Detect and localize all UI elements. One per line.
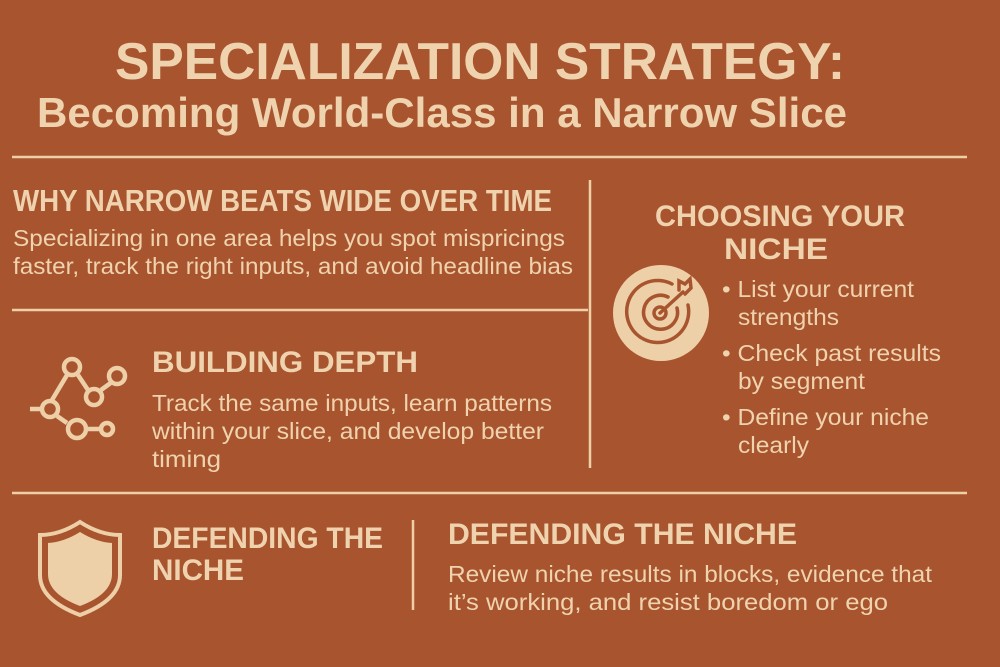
panel: why narrow beats wide: WHY NARROW BEATS WIDE OVER TIME bbox=[13, 183, 552, 218]
panel: defending the niche (left): DEFENDING THE bbox=[152, 522, 383, 555]
bullet list bbox=[722, 276, 941, 458]
bullet list: • Check past results bbox=[722, 340, 941, 366]
icon: target bbox=[613, 265, 709, 361]
panel: why narrow beats wide: Specializing in one area helps you spot mispricings bbox=[13, 225, 565, 251]
icon: network graph bbox=[30, 359, 125, 438]
panel: why narrow beats wide: faster, track the right inputs, and avoid headline bias bbox=[13, 253, 573, 279]
bullet list: strengths bbox=[738, 304, 839, 330]
panel: defending the niche (left) bbox=[40, 522, 383, 615]
title: Becoming World-Class in a Narrow Slice bbox=[37, 89, 847, 136]
bullet list: clearly bbox=[738, 432, 810, 458]
bullet list: • Define your niche bbox=[722, 404, 929, 430]
panel: choosing your niche: NICHE bbox=[724, 233, 828, 266]
panel: defending the niche (right): it’s working, and resist boredom or ego bbox=[448, 589, 888, 615]
panel: choosing your niche bbox=[613, 200, 941, 458]
panel: defending the niche (right): DEFENDING THE NICHE bbox=[448, 518, 797, 551]
panel: why narrow beats wide bbox=[13, 183, 573, 279]
panel: choosing your niche: CHOOSING YOUR bbox=[655, 200, 905, 233]
title bbox=[37, 33, 847, 136]
panel: building depth bbox=[30, 346, 552, 472]
panel: building depth: within your slice, and develop better bbox=[151, 418, 544, 444]
bullet list: • List your current bbox=[722, 276, 915, 302]
panel: defending the niche (left): NICHE bbox=[152, 554, 244, 587]
bullet list: by segment bbox=[738, 368, 866, 394]
panel: building depth: timing bbox=[152, 446, 221, 472]
icon: shield bbox=[40, 522, 120, 615]
panel: building depth: Track the same inputs, learn patterns bbox=[152, 390, 552, 416]
panel: building depth: BUILDING DEPTH bbox=[152, 346, 418, 379]
title: SPECIALIZATION STRATEGY: bbox=[115, 33, 845, 91]
panel: defending the niche (right) bbox=[448, 518, 933, 615]
panel: defending the niche (right): Review niche results in blocks, evidence that bbox=[448, 561, 933, 587]
